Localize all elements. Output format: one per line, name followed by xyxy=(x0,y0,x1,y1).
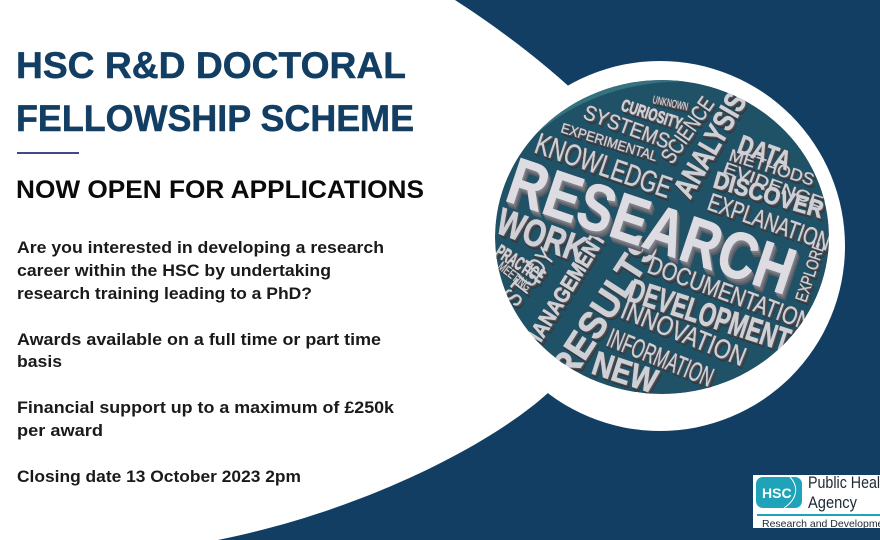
divider rule xyxy=(17,152,79,154)
word cloud image: EXPERIMENTAL xyxy=(559,120,660,164)
paragraph: financial support xyxy=(17,399,395,440)
word cloud image: DEVELOPMENT xyxy=(624,271,795,359)
word cloud image: STUDY xyxy=(497,242,561,312)
paragraph: award basis: Awards available on a full time or part time xyxy=(17,331,381,349)
word cloud image: MEETING xyxy=(495,259,534,294)
body text xyxy=(17,239,395,486)
paragraph: research career question: career within the HSC by undertaking xyxy=(17,262,331,280)
word cloud image: RESEARCH xyxy=(499,143,805,308)
white ring around word cloud xyxy=(475,61,845,431)
logo: Public Health Agency xyxy=(753,474,880,530)
word cloud image: CURIOSITY xyxy=(619,96,685,133)
word cloud image: DATA xyxy=(734,129,795,176)
paragraph: research career question xyxy=(17,239,384,303)
paragraph: award basis: basis xyxy=(17,353,62,371)
subtitle: NOW OPEN FOR APPLICATIONS xyxy=(16,176,424,204)
title: HSC R&D DOCTORAL xyxy=(16,45,406,86)
word cloud image: NEW xyxy=(588,344,663,401)
white curved panel xyxy=(0,0,600,540)
word cloud image: ANALYSIS xyxy=(667,87,754,204)
word cloud image: MANAGEMENT xyxy=(518,227,611,355)
word cloud image: PRACTICE xyxy=(491,241,548,288)
word cloud image: INFORMATION xyxy=(603,323,718,393)
paragraph: award basis xyxy=(17,331,381,371)
word cloud image: METHODS xyxy=(727,146,817,190)
word cloud image: SCIENCE xyxy=(656,92,719,168)
word cloud image: UNKNOWN xyxy=(651,94,689,113)
word cloud image: EXPLORE xyxy=(792,239,829,304)
paragraph: financial support: per award xyxy=(17,422,103,440)
word cloud image: EVIDENCE xyxy=(721,160,825,212)
word cloud image: SYSTEMS xyxy=(580,101,673,153)
word cloud image xyxy=(495,80,829,394)
word cloud image: KNOWLEDGE xyxy=(531,127,676,205)
logo: Public Health Agency: Agency xyxy=(808,494,858,512)
word cloud image: INNOVATION xyxy=(617,295,750,372)
icon: HSC badge: HSC xyxy=(762,485,792,501)
paragraph: research career question: Are you interested in developing a research xyxy=(17,239,384,257)
word cloud image: DISCOVER xyxy=(710,167,826,224)
title xyxy=(16,45,414,139)
paragraph: research career question: research training leading to a PhD? xyxy=(17,285,312,303)
word cloud image: DOCUMENTATION xyxy=(644,251,815,336)
title: FELLOWSHIP SCHEME xyxy=(16,98,414,139)
word cloud image: EXPLANATION xyxy=(704,188,834,256)
paragraph: closing date: Closing date 13 October 2023 2pm xyxy=(17,468,301,486)
paragraph: financial support: Financial support up to a maximum of £250k xyxy=(17,399,395,417)
word cloud image: RESULTS xyxy=(542,228,667,389)
word cloud image: WORK xyxy=(491,201,592,272)
